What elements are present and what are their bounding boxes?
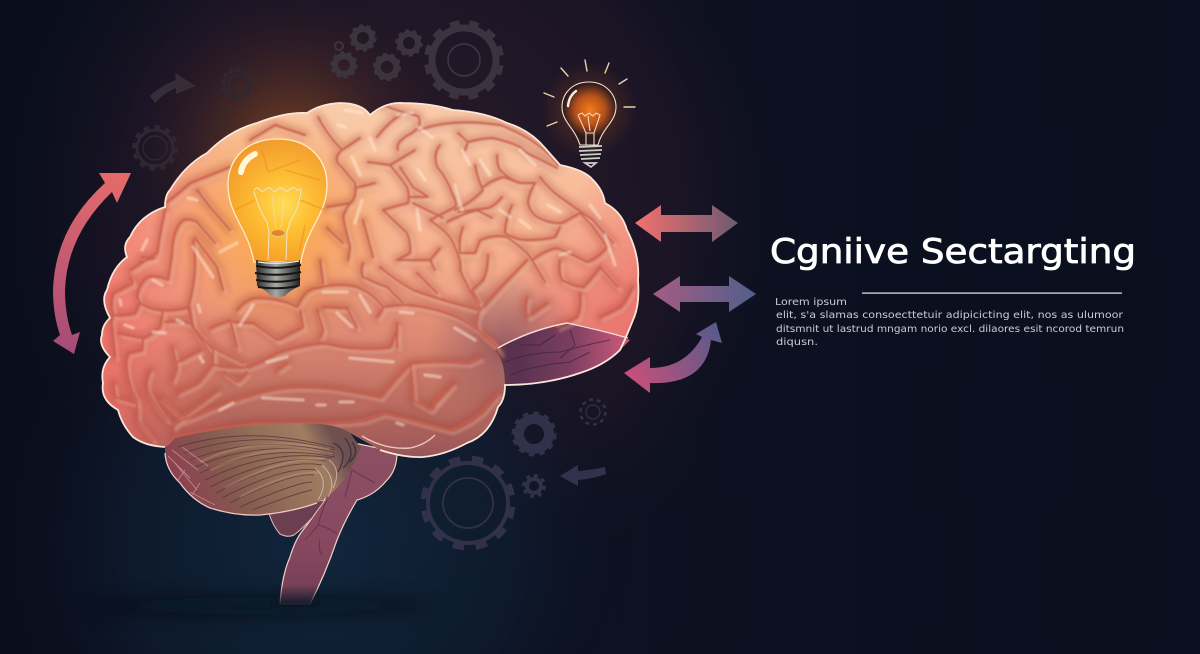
body text <box>775 297 1124 348</box>
sulci lines <box>111 105 632 440</box>
text line 4: diqusn. <box>776 337 818 348</box>
bulb glass folds <box>235 150 325 250</box>
bulb filament <box>254 188 301 260</box>
gear: small left lower <box>332 53 356 77</box>
small bulb rays <box>544 60 635 126</box>
gear: large top <box>422 18 506 102</box>
gear: tiny <box>335 42 343 50</box>
small bulb socket <box>579 146 602 167</box>
sulci soft shading <box>111 105 632 440</box>
cerebrum body <box>90 90 650 470</box>
arrow: right curved magenta <box>624 322 722 393</box>
cerebellum <box>165 418 360 515</box>
small lobe under cerebellum <box>268 500 325 536</box>
divider line <box>862 292 1122 294</box>
arrow: right double violet <box>653 276 756 312</box>
icon: small light bulb <box>541 60 637 167</box>
brain <box>90 90 650 607</box>
gear: small bottom <box>524 476 544 496</box>
bulb reflection <box>241 154 255 172</box>
gear: small top left <box>351 26 375 50</box>
lobe divider <box>498 323 628 348</box>
arrow: faint upper left <box>150 73 196 103</box>
brain stem detail <box>305 470 375 555</box>
gyri light rim <box>114 108 635 444</box>
title: Cgniive Sectargting <box>770 232 1136 272</box>
arrow: faint lower <box>560 465 606 486</box>
arrow: right double salmon <box>635 205 738 242</box>
arrow: large curved left <box>53 173 131 354</box>
gear: medium solid <box>514 414 554 454</box>
small bulb filament <box>578 113 600 145</box>
bulb socket <box>255 260 301 297</box>
small bulb reflection <box>568 91 576 106</box>
text line 3: ditsmnit ut lastrud mngam norio excl. dilaores esit ncorod temrun <box>776 324 1124 335</box>
text line 2: elit, s'a slamas consoecttetuir adipicicting elit, nos as ulumoor <box>776 310 1123 321</box>
gyrus highlights <box>120 110 615 425</box>
bulb glass <box>228 139 327 262</box>
icon: large light bulb <box>228 139 327 297</box>
brain stem <box>280 440 397 604</box>
gear: outlined left <box>134 127 176 169</box>
gear: large bottom <box>420 455 516 551</box>
gears, lower cluster <box>420 400 606 551</box>
lower lobe shading <box>190 291 510 454</box>
lobe white crease <box>362 435 435 448</box>
background gears, upper cluster <box>134 18 506 169</box>
gear: outlined near arrow <box>222 69 252 99</box>
gear: small centre lower <box>374 54 400 80</box>
dark lobe veins <box>505 330 610 375</box>
gear: small top middle <box>397 31 421 55</box>
small bulb glass <box>562 82 616 145</box>
text line 1: Lorem ipsum <box>775 297 847 308</box>
gear: small outlined top <box>580 400 606 424</box>
brain outline <box>101 103 638 457</box>
dark rear lobe <box>495 323 630 385</box>
